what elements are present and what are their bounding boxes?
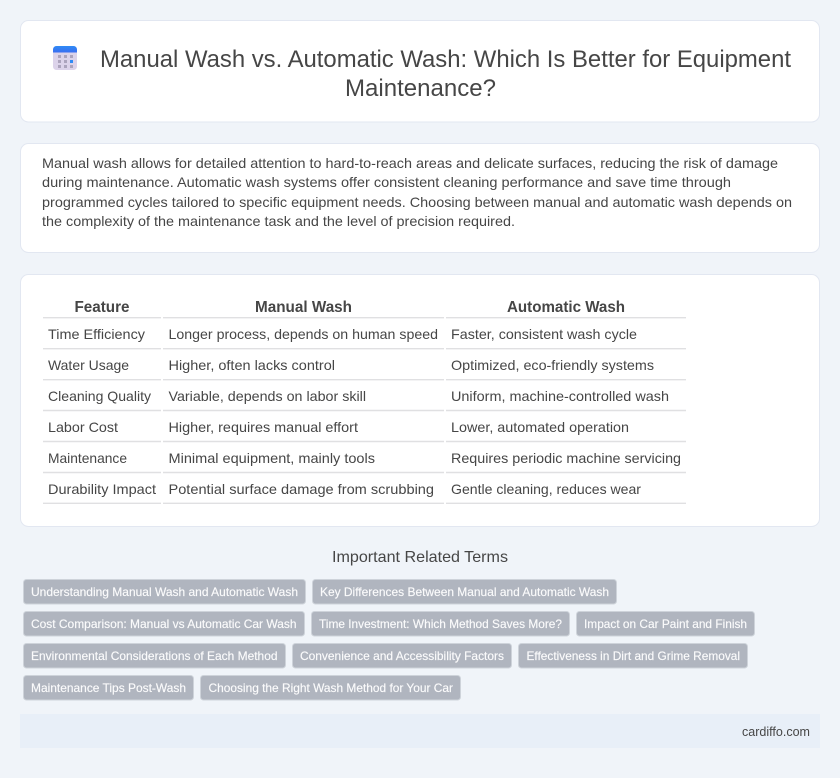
tag: Understanding Manual Wash and Automatic Wash: [31, 585, 298, 599]
table header row: Automatic Wash: [507, 299, 625, 316]
tag: [24, 676, 194, 700]
row: labor cost: Higher, requires manual effort: [168, 420, 358, 435]
row: cleaning quality: Cleaning Quality: [48, 389, 151, 404]
table header row: Manual Wash: [255, 299, 352, 316]
intro text: the complexity of the maintenance task and the level of precision required.: [42, 214, 515, 229]
title heading: [100, 46, 791, 102]
row: maintenance: Maintenance: [48, 451, 127, 466]
intro text: during maintenance. Automatic wash systems offer consistent cleaning performance and save time through: [42, 175, 731, 190]
title panel: [20, 20, 820, 122]
footer: [20, 714, 820, 748]
tag: [24, 580, 306, 604]
row: maintenance: Minimal equipment, mainly tools: [168, 451, 375, 466]
row: durability impact: Durability Impact: [48, 482, 156, 497]
tag: [24, 644, 286, 668]
related term tags: [24, 580, 754, 700]
tag: Choosing the Right Wash Method for Your Car: [208, 681, 453, 695]
row: labor cost: [48, 420, 629, 435]
tag: [24, 612, 304, 636]
tag: [576, 612, 754, 636]
footer: cardiffo.com: [742, 724, 810, 739]
row: water usage: Optimized, eco-friendly systems: [451, 358, 654, 373]
title heading: Manual Wash vs. Automatic Wash: Which Is Better for Equipment: [100, 46, 791, 73]
tag: [312, 612, 570, 636]
intro text: Manual wash allows for detailed attention to hard-to-reach areas and delicate surfaces, reducing the risk of damage: [42, 156, 778, 171]
row: cleaning quality: [48, 389, 669, 404]
row: labor cost: Lower, automated operation: [451, 420, 629, 435]
table header row: [74, 299, 625, 316]
row: durability impact: [48, 482, 641, 497]
tag: [312, 580, 616, 604]
row: water usage: Water Usage: [48, 358, 129, 373]
tag: Convenience and Accessibility Factors: [300, 649, 504, 663]
row: labor cost: Labor Cost: [48, 420, 118, 435]
tag: Time Investment: Which Method Saves More?: [319, 617, 562, 631]
row: maintenance: Requires periodic machine servicing: [451, 451, 681, 466]
intro text: [42, 156, 792, 229]
icon: calendar: [53, 46, 77, 70]
intro text: programmed cycles tailored to specific equipment needs. Choosing between manual and automatic wash depends on: [42, 195, 792, 210]
panel: introduction paragraph: [20, 144, 820, 252]
tag: Impact on Car Paint and Finish: [584, 617, 747, 631]
table header row: Feature: [74, 299, 130, 316]
tag: Key Differences Between Manual and Automatic Wash: [320, 585, 609, 599]
row: time efficiency: Longer process, depends on human speed: [168, 327, 438, 342]
row: water usage: Higher, often lacks control: [168, 358, 335, 373]
heading: important related terms: Important Related Terms: [332, 549, 508, 566]
tag: [518, 644, 748, 668]
row: time efficiency: Time Efficiency: [48, 327, 145, 342]
row: water usage: [48, 358, 654, 373]
row: cleaning quality: Uniform, machine-controlled wash: [451, 389, 669, 404]
row: durability impact: Gentle cleaning, reduces wear: [451, 482, 641, 497]
row: cleaning quality: Variable, depends on labor skill: [168, 389, 366, 404]
tag: Effectiveness in Dirt and Grime Removal: [526, 649, 740, 663]
tag: Maintenance Tips Post-Wash: [31, 681, 186, 695]
row: durability impact: Potential surface damage from scrubbing: [168, 482, 434, 497]
tag: [292, 644, 512, 668]
row: time efficiency: [48, 327, 637, 342]
row: maintenance: [48, 451, 681, 466]
title heading: Maintenance?: [345, 75, 496, 102]
tag: Environmental Considerations of Each Method: [31, 649, 278, 663]
tag: [200, 676, 460, 700]
row: time efficiency: Faster, consistent wash cycle: [451, 327, 637, 342]
panel: comparison table: [20, 274, 820, 526]
tag: Cost Comparison: Manual vs Automatic Car Wash: [31, 617, 296, 631]
